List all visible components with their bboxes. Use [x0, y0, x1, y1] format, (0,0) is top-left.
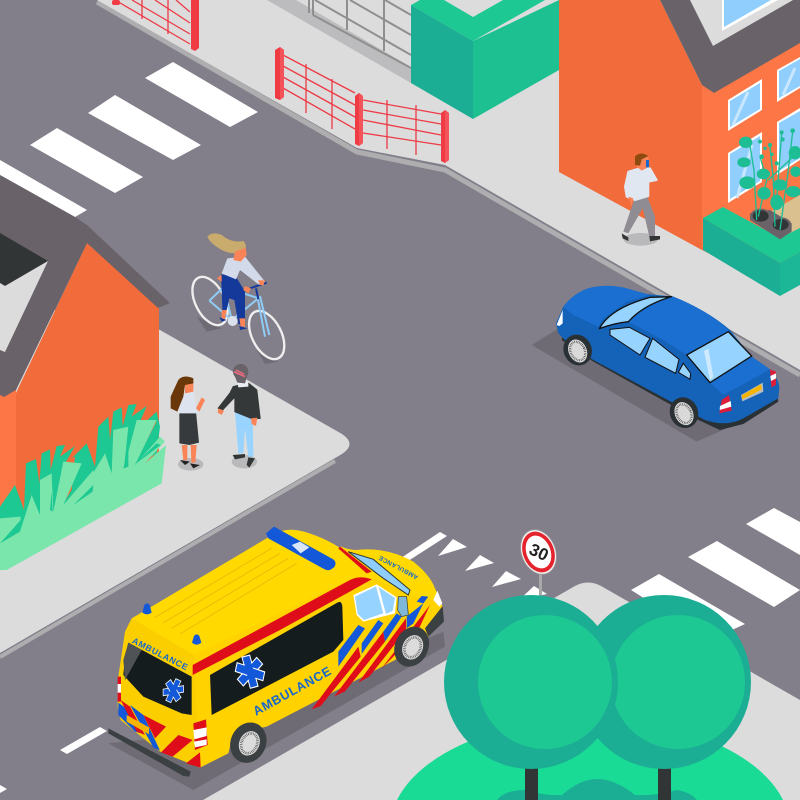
sidewalk: left corner [0, 300, 350, 653]
cyclist [185, 233, 292, 365]
curb: upper sidewalk [97, 2, 800, 375]
dormer shadow [0, 233, 48, 286]
mirror [398, 597, 408, 617]
hood [563, 286, 650, 327]
car shadow [532, 329, 727, 442]
bumper [108, 728, 191, 777]
man [218, 364, 260, 468]
gray fence behind the sidewalk [267, 0, 411, 83]
front wall [702, 30, 800, 290]
trunk [710, 357, 770, 395]
side windows [610, 327, 650, 355]
rider torso [222, 257, 265, 285]
rear window [687, 332, 752, 383]
windshield [599, 297, 672, 329]
dormer window [722, 0, 778, 31]
house: left [0, 175, 170, 540]
license plate [127, 715, 149, 734]
star of life: rear [159, 676, 187, 706]
rear wheel [224, 716, 273, 769]
frame [209, 287, 269, 337]
crosswalk: bottom right [631, 508, 800, 640]
ambulance [108, 527, 445, 790]
pedestrian on phone [622, 153, 660, 246]
side wall [559, 0, 702, 250]
roof [628, 297, 729, 355]
wheels [185, 271, 235, 331]
front wall [0, 390, 16, 535]
car body [556, 286, 779, 423]
speed limit sign: 30 [526, 540, 551, 565]
couple talking [171, 364, 260, 471]
tree: right [577, 595, 751, 800]
star of life: side [232, 652, 268, 691]
rider legs [221, 274, 245, 326]
hedge: grass bush [0, 404, 166, 570]
headlight [557, 310, 563, 326]
front wheel [388, 621, 436, 672]
rider hair [207, 233, 246, 253]
rear lettering: AMBULANCE [131, 636, 190, 672]
side body [193, 574, 443, 768]
red fence: top [112, 0, 199, 51]
side chevrons [312, 605, 430, 709]
hood lettering: AMBULANCE [378, 554, 420, 580]
crosswalk: top left [0, 62, 258, 217]
tree: left [444, 595, 618, 800]
dormer wall [0, 261, 48, 352]
windshield [348, 552, 410, 595]
shadow [108, 632, 445, 790]
green hedge block [411, 0, 559, 119]
sidewalk: lower right corner [203, 582, 800, 800]
car underside [562, 333, 778, 430]
dormer [690, 0, 793, 46]
curb: left sidewalk [0, 461, 335, 657]
tail lights [193, 719, 208, 750]
side window [210, 602, 343, 715]
roof [132, 530, 373, 655]
rear face [118, 618, 200, 768]
rear chevrons [118, 700, 201, 768]
tail lights [719, 395, 732, 413]
red stripe [193, 577, 372, 675]
side wall [16, 243, 159, 540]
woman [171, 377, 205, 471]
side lettering: AMBULANCE [251, 664, 334, 719]
roof [660, 0, 800, 93]
license plate [741, 383, 763, 401]
blue car [532, 286, 779, 442]
wheel shadows [197, 317, 222, 332]
red fence: middle sections [275, 47, 449, 163]
rear beacons [142, 603, 201, 645]
roof [0, 175, 170, 397]
road markings: shark teeth and lane dashes [0, 532, 547, 793]
light bar [266, 527, 336, 570]
front bumper [425, 606, 444, 637]
planter box [703, 195, 800, 296]
cab window [353, 584, 397, 622]
hood [340, 546, 440, 600]
window grid [728, 57, 800, 203]
rear wheel [665, 393, 703, 433]
house: top right [559, 0, 800, 290]
speed limit sign [514, 524, 563, 605]
rear window [123, 643, 192, 715]
bush under trees [397, 719, 783, 800]
roof ribs [155, 548, 297, 634]
headlight [433, 591, 442, 607]
front wheel [558, 330, 597, 370]
potted plants [737, 128, 800, 239]
sidewalk: upper right [97, 0, 800, 370]
